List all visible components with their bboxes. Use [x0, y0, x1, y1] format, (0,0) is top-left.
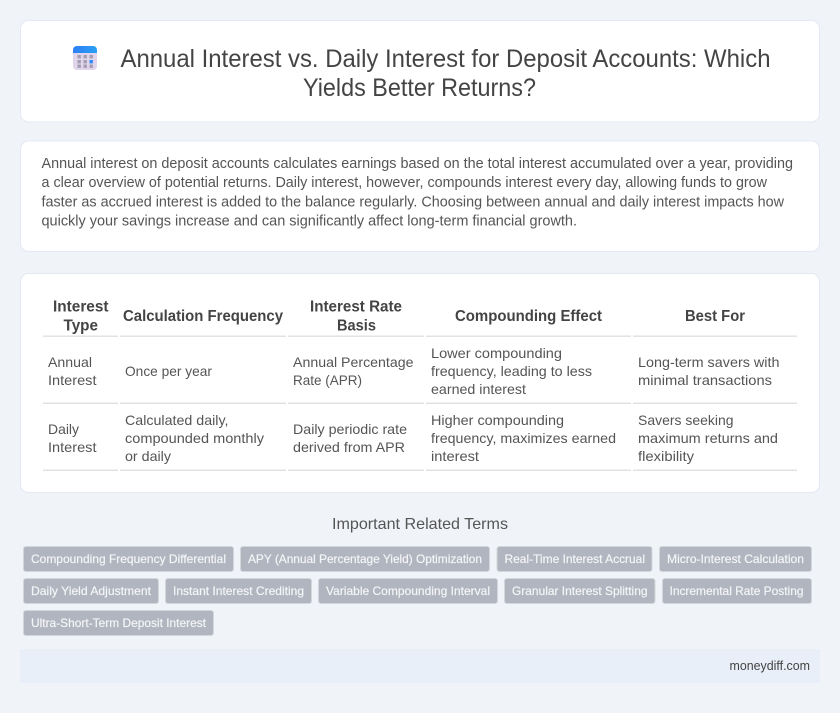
table header row: Interest Rate	[310, 298, 402, 316]
table header row: Calculation Frequency	[123, 308, 283, 325]
table row: daily interest: frequency, maximizes earned	[431, 430, 616, 446]
panel: intro text	[20, 141, 820, 252]
tag: Daily Yield Adjustment	[24, 578, 158, 604]
tag: Ultra-Short-Term Deposit Interest: Ultra-Short-Term Deposit Interest	[31, 616, 207, 630]
footer	[20, 649, 820, 683]
table header row	[53, 298, 745, 334]
tag: Compounding Frequency Differential	[24, 546, 234, 572]
table row: annual interest: frequency, leading to less	[431, 363, 592, 379]
table row: daily interest: compounded monthly	[125, 430, 264, 446]
panel: intro text: a clear overview of potential returns. Daily interest, however, compounds interest every day, allowing funds to grow	[42, 175, 768, 191]
table row: daily interest: interest	[431, 448, 479, 464]
table row: annual interest: Rate (APR)	[293, 372, 362, 388]
tag: Instant Interest Crediting	[166, 578, 312, 604]
table row: annual interest: minimal transactions	[638, 372, 772, 388]
table row: annual interest: Long-term savers with	[638, 354, 780, 370]
panel: related term tags	[24, 546, 812, 636]
tag: Variable Compounding Interval: Variable Compounding Interval	[326, 584, 490, 598]
table header row: Type	[64, 318, 98, 334]
tag: Real-Time Interest Accrual	[497, 546, 652, 572]
tag: APY Optimization	[240, 546, 490, 572]
table row: daily interest: flexibility	[638, 448, 694, 464]
tag: Incremental Rate Posting	[662, 578, 812, 604]
tag: Ultra-Short-Term Deposit Interest	[24, 610, 214, 636]
table row: daily interest: Higher compounding	[431, 412, 564, 428]
table row: daily interest: Daily	[48, 421, 79, 437]
table header row: Basis	[337, 318, 376, 334]
title: Annual Interest vs. Daily Interest for Deposit Accounts: Which	[120, 45, 770, 73]
tag: Real-Time Interest Accrual: Real-Time Interest Accrual	[504, 552, 645, 566]
table header row: Best For	[685, 308, 745, 325]
tag: Variable Compounding Interval	[318, 578, 498, 604]
footer: moneydiff.com	[730, 658, 810, 673]
panel: intro text: faster as accrued interest is added to the balance regularly. Choosing between annual and daily interest impacts how	[42, 194, 785, 210]
panel: intro text: quickly your savings increase and can significantly affect long-term financial growth.	[42, 214, 577, 230]
tag: Daily Yield Adjustment: Daily Yield Adjustment	[31, 584, 152, 598]
tag: APY Optimization: APY (Annual Percentage Yield) Optimization	[248, 552, 482, 566]
table row: annual interest: Lower compounding	[431, 345, 562, 361]
table row: daily interest: Daily periodic rate	[293, 421, 407, 437]
table row: annual interest: Once per year	[125, 363, 212, 379]
title	[120, 45, 770, 102]
table header row: Compounding Effect	[455, 308, 603, 325]
tag: Incremental Rate Posting: Incremental Rate Posting	[670, 584, 804, 598]
table row: daily interest: or daily	[125, 448, 171, 464]
tag: Granular Interest Splitting: Granular Interest Splitting	[512, 584, 648, 598]
table row: annual interest: earned interest	[431, 381, 526, 397]
tag: Compounding Frequency Differential: Compounding Frequency Differential	[31, 552, 226, 566]
tag: Granular Interest Splitting	[504, 578, 655, 604]
title: Yields Better Returns?	[303, 74, 536, 102]
table row: annual interest	[48, 345, 780, 397]
table row: daily interest: derived from APR	[293, 439, 405, 455]
icon: calendar	[73, 46, 97, 70]
table row: daily interest: maximum returns and	[638, 430, 778, 446]
table row: annual interest: Annual Percentage	[293, 354, 414, 370]
heading: important related terms: Important Related Terms	[332, 516, 508, 533]
panel: title header	[20, 20, 820, 122]
table row: daily interest: Interest	[48, 439, 97, 455]
tag: Micro-Interest Calculation: Micro-Interest Calculation	[667, 552, 804, 566]
table row: annual interest: Annual	[48, 354, 92, 370]
tag: Micro-Interest Calculation	[660, 546, 812, 572]
table row: daily interest: Savers seeking	[638, 412, 734, 428]
table row: daily interest: Calculated daily,	[125, 412, 228, 428]
panel: comparison table	[20, 274, 820, 492]
table row: daily interest	[48, 412, 778, 464]
panel: intro text: Annual interest on deposit accounts calculates earnings based on the total interest accumulated over a year, providing	[42, 156, 793, 172]
tag: Instant Interest Crediting: Instant Interest Crediting	[173, 584, 304, 598]
table header row: Interest	[53, 298, 109, 316]
table row: annual interest: Interest	[48, 372, 97, 388]
